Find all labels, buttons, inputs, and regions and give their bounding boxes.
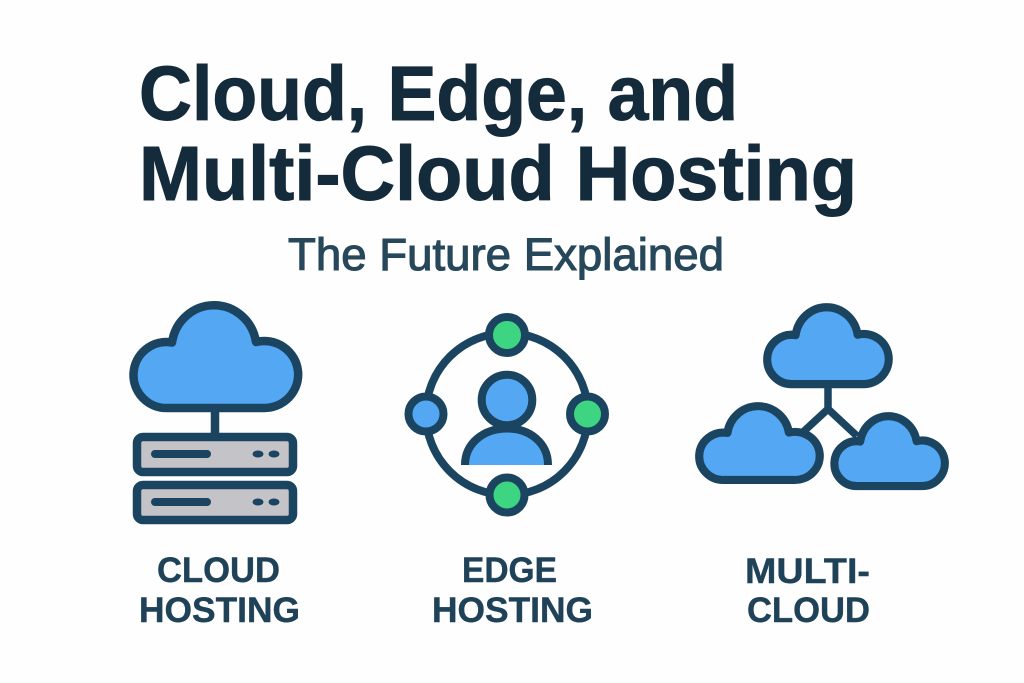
node bottom xyxy=(490,478,524,512)
cloud right xyxy=(834,416,945,486)
ring xyxy=(426,333,588,495)
label: multi-cloud: MULTI- xyxy=(745,552,870,591)
label: cloud hosting xyxy=(139,551,300,630)
title: Multi-Cloud Hosting xyxy=(139,131,857,217)
person body xyxy=(465,428,548,465)
icon: multi-cloud xyxy=(699,307,945,486)
person head xyxy=(482,375,532,425)
cloud xyxy=(133,305,298,408)
icon: cloud hosting xyxy=(133,305,298,520)
cloud left xyxy=(699,406,820,480)
server unit 1 xyxy=(137,437,293,472)
label: multi-cloud xyxy=(745,552,870,630)
title: Cloud, Edge, and xyxy=(139,51,738,137)
label: multi-cloud: CLOUD xyxy=(747,591,870,630)
connector: cloud to server xyxy=(211,408,219,437)
cloud top xyxy=(767,307,889,384)
subtitle: The Future Explained xyxy=(288,229,724,280)
label: edge hosting: HOSTING xyxy=(432,591,593,630)
title xyxy=(139,51,857,217)
node right xyxy=(570,396,605,432)
server unit 2 xyxy=(137,485,293,520)
label: edge hosting: EDGE xyxy=(462,551,557,590)
node left xyxy=(408,396,444,432)
icon: edge hosting xyxy=(408,317,605,512)
label: cloud hosting: CLOUD xyxy=(157,551,280,590)
connectors xyxy=(802,384,857,436)
node top xyxy=(489,317,525,353)
label: edge hosting xyxy=(432,551,593,630)
label: cloud hosting: HOSTING xyxy=(139,591,300,630)
